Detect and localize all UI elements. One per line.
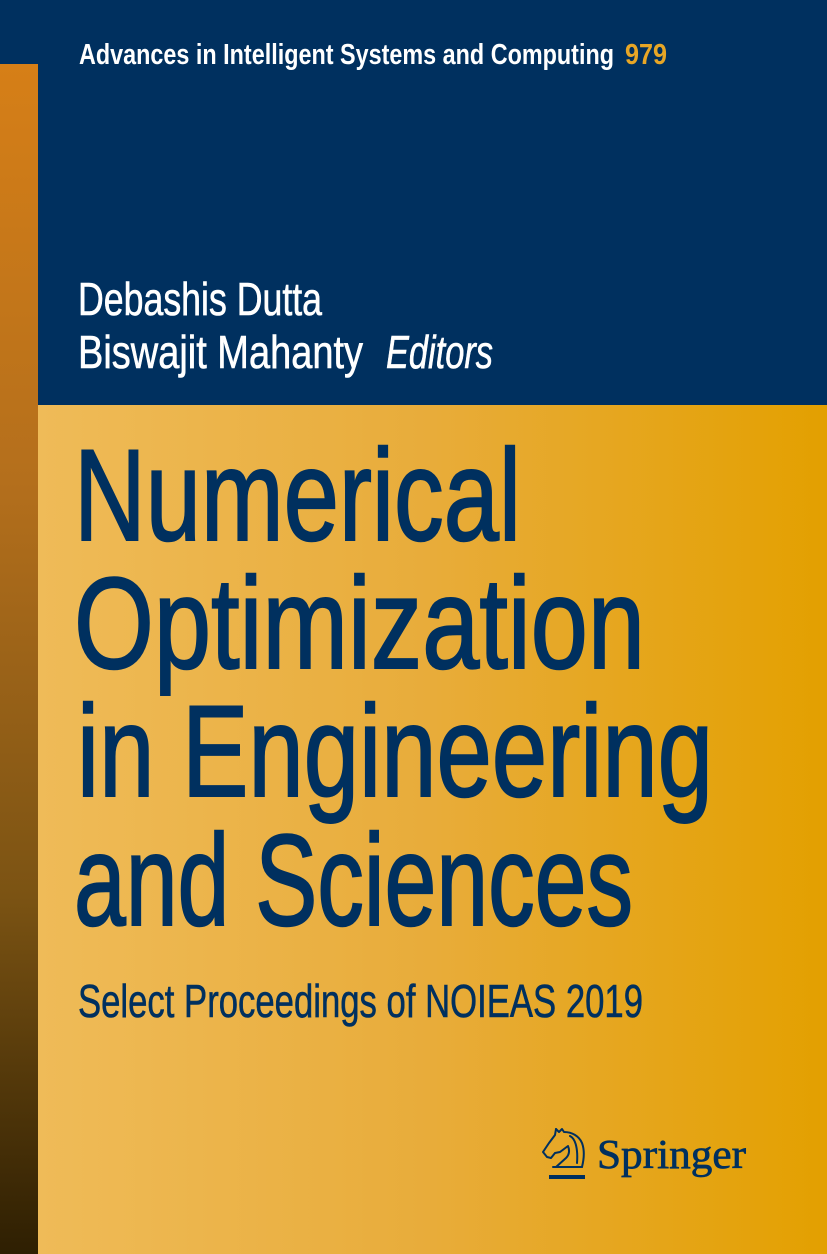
navy header panel (0, 0, 827, 405)
series title: Advances in Intelligent Systems and Computing (79, 39, 614, 71)
Springer wordmark: Springer (597, 1131, 746, 1177)
subtitle: Select Proceedings of NOIEAS 2019 (78, 975, 643, 1027)
icon: Springer horse logo (543, 1129, 585, 1179)
orange gradient spine (0, 64, 38, 1254)
editor name 1: Debashis Dutta (78, 273, 322, 325)
book title (74, 422, 713, 953)
gold title panel (38, 405, 827, 1254)
book title: Numerical (74, 422, 521, 568)
series number: 979 (625, 39, 667, 71)
editors label: Editors (386, 326, 493, 378)
book title: Optimization (74, 550, 645, 696)
editor name 2: Biswajit Mahanty (78, 326, 363, 378)
